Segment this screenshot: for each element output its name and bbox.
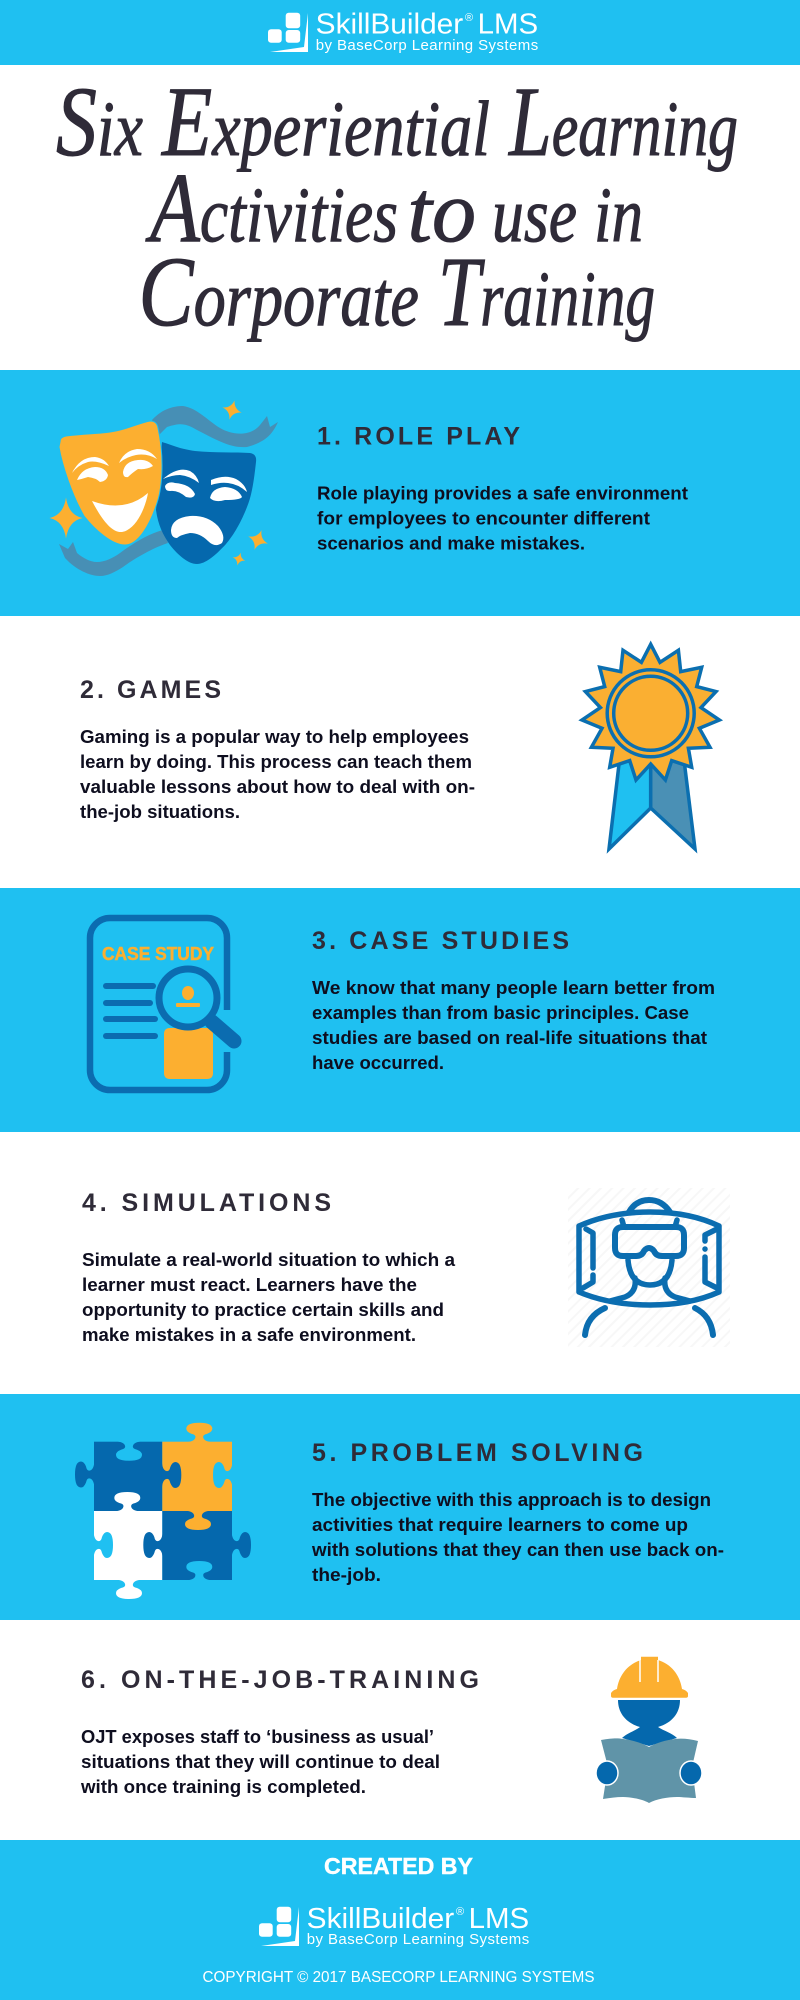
text: simulations: make mistakes in a safe environment. (82, 1325, 416, 1345)
title: Training (438, 236, 655, 347)
text: games: valuable lessons about how to deal with on- (80, 777, 475, 797)
title: Experiential (160, 66, 490, 177)
icon: case study document (90, 918, 234, 1090)
text: simulations: learner must react. Learners have the (82, 1275, 417, 1295)
icon: VR headset person (568, 1188, 730, 1347)
text: on the job training (80, 1727, 440, 1797)
title: Six (56, 66, 143, 177)
icon: case study document: CASE STUDY (102, 944, 214, 964)
text: on the job training: with once training is completed. (80, 1777, 366, 1797)
text: games: Gaming is a popular way to help employees (80, 727, 469, 747)
header band with logo (0, 0, 800, 65)
text: case studies: studies are based on real-life situations that (312, 1028, 707, 1048)
title (56, 66, 738, 347)
text: on the job training: OJT exposes staff to ‘business as usual’ (81, 1727, 434, 1747)
text: on the job training: situations that they will continue to deal (81, 1752, 440, 1772)
title: Corporate (138, 236, 419, 347)
text: problem solving: with solutions that they can then use back on- (311, 1540, 724, 1560)
logo: SkillBuilder LMS footer: SkillBuilder (307, 1903, 455, 1935)
text: problem solving: the-job. (312, 1565, 381, 1585)
logo: SkillBuilder LMS: ® (465, 12, 473, 24)
text: problem solving (311, 1490, 724, 1585)
title: Learning (507, 66, 738, 177)
text: role play: scenarios and make mistakes. (317, 534, 585, 554)
logo: SkillBuilder LMS (268, 8, 538, 54)
icon: award ribbon (582, 644, 719, 849)
panel: on the job training (80, 1657, 702, 1803)
logo: SkillBuilder LMS footer (259, 1903, 529, 1948)
copyright: COPYRIGHT © 2017 BASECORP LEARNING SYSTEMS (202, 1969, 594, 1986)
icon: jigsaw puzzle (75, 1423, 251, 1599)
heading: on the job training: 6. ON-THE-JOB-TRAINING (81, 1666, 479, 1694)
logo: SkillBuilder LMS footer: LMS (469, 1903, 529, 1935)
text: games: learn by doing. This process can teach them (80, 752, 472, 772)
logo: SkillBuilder LMS footer: ® (456, 1906, 464, 1918)
heading: simulations: 4. SIMULATIONS (82, 1189, 331, 1217)
text: case studies: have occurred. (312, 1053, 444, 1073)
text: games: the-job situations. (80, 802, 240, 822)
panel: role play (0, 370, 800, 616)
title: in (594, 171, 643, 258)
icon: theatre masks (50, 398, 278, 576)
panel: simulations (82, 1188, 730, 1347)
heading: case studies: 3. CASE STUDIES (312, 927, 569, 955)
heading: role play: 1. ROLE PLAY (317, 422, 520, 450)
panel: problem solving (0, 1394, 800, 1620)
text: simulations (82, 1250, 456, 1345)
text: simulations: Simulate a real-world situation to which a (82, 1250, 456, 1270)
text: case studies: We know that many people learn better from (312, 978, 715, 998)
text: simulations: opportunity to practice certain skills and (82, 1300, 444, 1320)
text: role play: for employees to encounter different (317, 508, 650, 528)
panel: case studies (0, 888, 800, 1132)
logo: SkillBuilder LMS footer: by BaseCorp Learning Systems (307, 1931, 529, 1948)
text: problem solving: activities that require learners to come up (312, 1515, 688, 1535)
heading: games: 2. GAMES (80, 676, 221, 704)
logo: SkillBuilder LMS: LMS (478, 8, 538, 40)
panel: games (80, 644, 719, 849)
text: role play (317, 484, 688, 554)
heading: created by: CREATED BY (324, 1853, 473, 1879)
title: to (408, 164, 476, 261)
text: games (80, 727, 475, 822)
text: problem solving: The objective with this approach is to design (312, 1490, 711, 1510)
title: use (492, 171, 577, 258)
text: role play: Role playing provides a safe environment (317, 484, 688, 504)
heading: problem solving: 5. PROBLEM SOLVING (312, 1439, 643, 1467)
text: case studies: examples than from basic principles. Case (312, 1003, 689, 1023)
logo: SkillBuilder LMS: by BaseCorp Learning Systems (316, 37, 538, 54)
title: Activities (145, 152, 398, 263)
text: case studies (312, 978, 715, 1073)
icon: worker reading (596, 1657, 702, 1803)
logo: SkillBuilder LMS: SkillBuilder (316, 8, 464, 40)
footer band (0, 1840, 800, 2000)
